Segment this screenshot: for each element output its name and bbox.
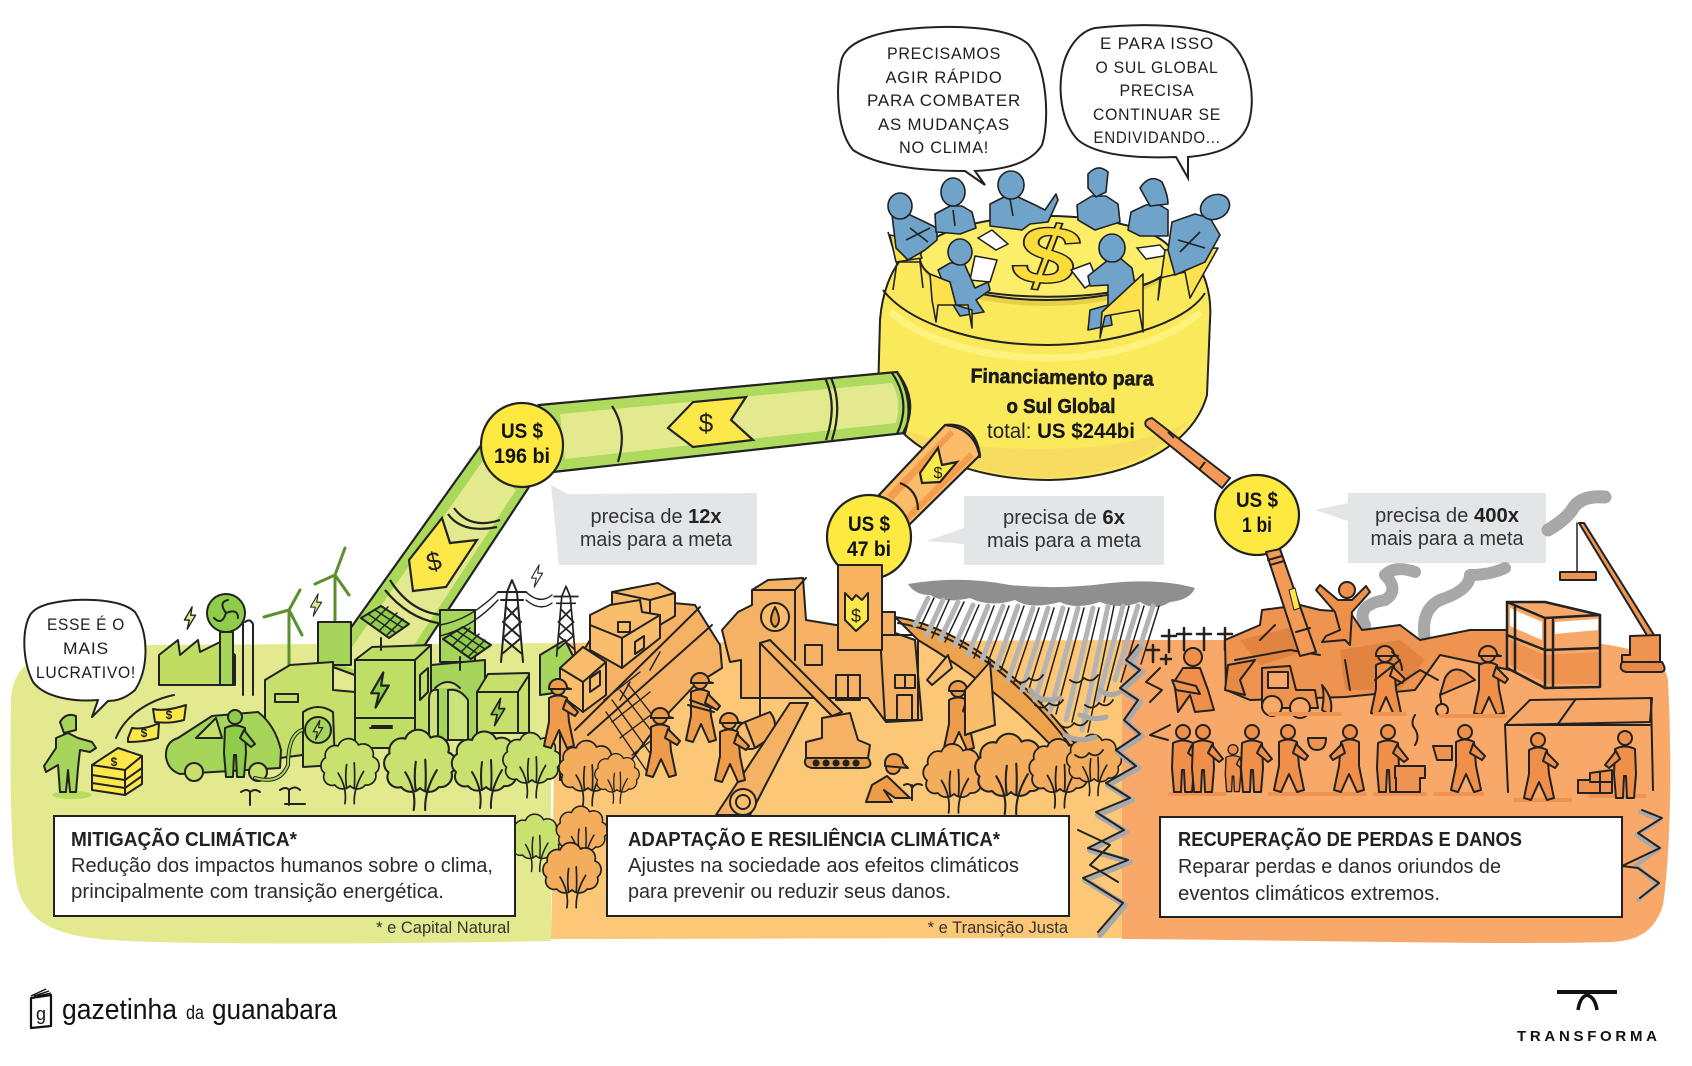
speech bubble: precisamos agir: AGIR RÁPIDO: [886, 68, 1002, 87]
rain: [915, 598, 1159, 732]
callout: 6x: precisa de 6x: [1003, 507, 1125, 529]
survivor holding a child: [1172, 648, 1214, 712]
shelter tent with workers and bricks: [1505, 698, 1653, 800]
panel background: adaptation band: [551, 640, 1125, 939]
green diagonal pipe: $: [423, 545, 445, 578]
wind turbines: [264, 548, 349, 665]
text box: adaptação e resiliência: Ajustes na sociedade aos efeitos climáticos: [628, 855, 1019, 877]
value circle: US$47 bi: [827, 495, 911, 579]
back-left chair and man with crossed arms: [888, 193, 937, 290]
car at charger: [166, 712, 281, 781]
lower orange pipe with shield: $: [851, 606, 861, 626]
loss and damage illustration: [1147, 497, 1665, 900]
callout: 400x: precisa de 400x: [1375, 505, 1519, 527]
jagged crack between zones: [1078, 645, 1170, 935]
money bills and arrow: [116, 695, 186, 742]
speech bubble: esse é o mais lucrativo: [24, 600, 146, 717]
charging station: [255, 707, 335, 780]
worker with pickaxe: [1371, 646, 1405, 715]
thin orange pipe to the right: [1145, 418, 1230, 488]
text box: adaptação e resiliência: [607, 816, 1069, 916]
logo: gazetinha da guanabara: [31, 989, 338, 1028]
ground shadows under the crowd: [1170, 714, 1645, 800]
central building complex: [722, 578, 922, 722]
callout: 6x: mais para a meta: [987, 530, 1142, 552]
footnote: transição justa: * e Transição Justa: [928, 919, 1069, 937]
orange trees: [543, 734, 1121, 908]
footnote: capital natural: * e Capital Natural: [376, 919, 510, 937]
panel background: loss and damage band: [1122, 640, 1670, 943]
rubble mound: [1225, 605, 1510, 700]
text box: recuperação de perdas e danos: eventos climáticos extremos.: [1178, 883, 1440, 905]
front-left man reading with chair: [930, 239, 997, 328]
woman speaking: [990, 171, 1058, 230]
speech bubble: precisamos agir: PRECISAMOS: [887, 44, 1001, 63]
person charging car: [224, 710, 255, 777]
pipeline on the ground: [716, 703, 808, 815]
value circle: US$196 bi: US $: [501, 420, 543, 443]
money bills and arrow: $: [166, 708, 173, 722]
cheering person on rubble: [1316, 582, 1370, 645]
text box: recuperação de perdas e danos: RECUPERAÇÃO DE PERDAS E DANOS: [1178, 828, 1522, 851]
construction net: [604, 672, 668, 773]
lower orange pipe with shield: [838, 565, 882, 650]
speech bubble: o sul global precisa: CONTINUAR SE: [1093, 105, 1221, 124]
right man with crossed arms: [1158, 190, 1234, 300]
speech bubble: o sul global precisa: [1061, 25, 1252, 178]
speech bubble: precisamos agir: AS MUDANÇAS: [878, 115, 1010, 134]
speech bubble: o sul global precisa: E PARA ISSO: [1100, 34, 1214, 53]
logo: gazetinha da guanabara: guanabara: [212, 994, 338, 1026]
speech bubble: o sul global precisa: ENDIVIDANDO...: [1094, 128, 1220, 147]
round table with dollar sign: $: [1009, 206, 1084, 306]
speech bubble: precisamos agir: [838, 27, 1046, 185]
logo: gazetinha da guanabara: gazetinha: [62, 994, 178, 1026]
text box: mitigação climática: principalmente com transição energética.: [71, 881, 444, 903]
woman in back right: [1128, 179, 1168, 236]
worker with wheelbarrow: [1436, 646, 1508, 716]
speech bubble: o sul global precisa: O SUL GLOBAL: [1096, 58, 1218, 77]
green trees: [321, 730, 562, 872]
callout: 12x: [551, 485, 757, 565]
green horizontal pipe: [539, 372, 910, 472]
text box: adaptação e resiliência: ADAPTAÇÃO E RESILIÊNCIA CLIMÁTICA*: [628, 827, 1000, 851]
yellow funding cylinder: Financiamento para: [970, 365, 1155, 391]
value circle: US$196 bi: [481, 403, 563, 487]
front-right man writing with chair: [1071, 234, 1143, 338]
logo: transforma: [1517, 990, 1657, 1045]
transmission towers: [440, 565, 578, 662]
value circle: US$1 bi: [1215, 475, 1299, 555]
logo: transforma: TRANSFORMA: [1517, 1028, 1657, 1045]
sprouts: [241, 788, 305, 805]
speech bubble: esse é o mais lucrativo: ESSE É O: [47, 615, 125, 634]
graves: [1147, 628, 1232, 664]
money box: [92, 748, 142, 795]
callout: 12x: precisa de 12x: [590, 506, 722, 528]
scaffold building frame: [1507, 602, 1600, 688]
yellow funding cylinder: o Sul Global: [1006, 396, 1116, 418]
bulldozer: [1262, 666, 1331, 718]
text box: mitigação climática: [54, 816, 515, 916]
text box: recuperação de perdas e danos: [1160, 817, 1622, 917]
icon: book: [31, 989, 51, 1028]
green horizontal pipe: $: [699, 408, 714, 438]
panel background: mitigation band: [11, 643, 560, 944]
adaptation illustration: [543, 565, 1195, 935]
lower thin orange pipe entering the rubble: [1266, 549, 1316, 656]
worker planting a seedling: [866, 754, 922, 802]
money box: $: [111, 755, 118, 769]
people around the table: [888, 168, 1234, 338]
speech bubble: o sul global precisa: PRECISA: [1120, 81, 1194, 100]
speech bubble: precisamos agir: PARA COMBATER: [867, 91, 1021, 110]
value circle: US$1 bi: 1 bi: [1242, 514, 1272, 537]
speech bubble: precisamos agir: NO CLIMA!: [899, 138, 989, 157]
battery and power buildings: [265, 610, 575, 760]
callout: 6x: [927, 496, 1164, 565]
value circle: US$1 bi: US $: [1236, 489, 1278, 512]
speech bubble: esse é o mais lucrativo: MAIS: [63, 639, 109, 658]
hillside with terraced houses: [560, 600, 722, 780]
text box: adaptação e resiliência: para prevenir ou reduzir seus danos.: [628, 881, 951, 903]
text box: recuperação de perdas e danos: Reparar perdas e danos oriundos de: [1178, 856, 1501, 878]
round table with dollar sign: [920, 206, 1174, 306]
grey smoke plumes: [1362, 497, 1605, 640]
storm cloud: [908, 580, 1195, 607]
speech bubble: esse é o mais lucrativo: LUCRATIVO!: [36, 663, 136, 682]
retaining wall arc: [895, 617, 1076, 755]
callout: 400x: mais para a meta: [1370, 528, 1524, 550]
terraced houses: [560, 583, 675, 712]
logo: gazetinha da guanabara: da: [186, 1003, 204, 1024]
callout: 400x: [1315, 493, 1546, 563]
money bills and arrow: $: [141, 726, 148, 740]
excavator lifting a pipe: [736, 640, 870, 768]
orange upper pipe: $: [934, 465, 943, 482]
yellow funding cylinder: [878, 255, 1210, 480]
row of people helping each other: [1172, 715, 1485, 792]
factory and wind stack: [159, 594, 253, 695]
construction crane: [1560, 523, 1665, 672]
seated man looking down: [935, 178, 976, 234]
flood waves: [1015, 675, 1120, 758]
solar panels: [361, 606, 491, 670]
value circle: US$47 bi: US $: [848, 513, 890, 536]
icon: book: g: [36, 1004, 46, 1024]
workers: [544, 673, 978, 782]
value circle: US$196 bi: 196 bi: [494, 445, 550, 468]
text box: mitigação climática: MITIGAÇÃO CLIMÁTICA*: [71, 828, 297, 851]
value circle: US$47 bi: 47 bi: [847, 538, 891, 561]
mitigation illustration: [24, 548, 578, 872]
man beside money box: [44, 715, 96, 799]
yellow funding cylinder: total: US $244bi: [987, 420, 1135, 443]
man in back centre: [1077, 168, 1120, 230]
green diagonal pipe: [325, 444, 529, 690]
callout: 12x: mais para a meta: [580, 529, 733, 551]
orange upper pipe: [879, 425, 980, 525]
text box: mitigação climática: Redução dos impactos humanos sobre o clima,: [71, 855, 493, 877]
right-edge crack: [1622, 810, 1662, 900]
